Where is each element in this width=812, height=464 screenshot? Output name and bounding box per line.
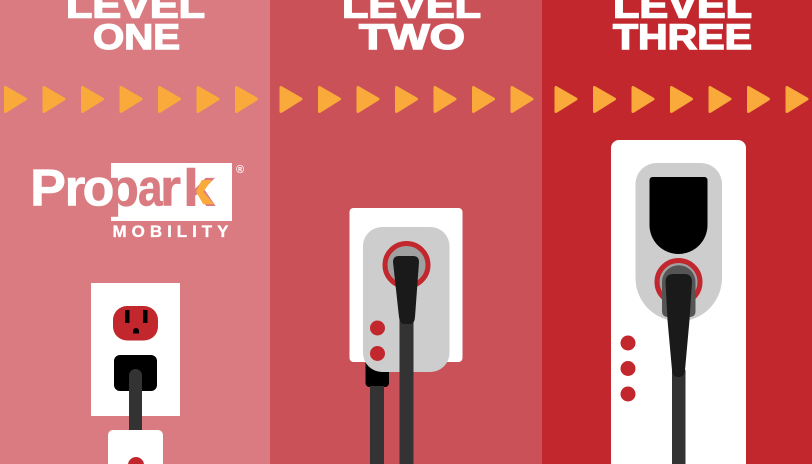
black screen (650, 177, 708, 254)
logo word: Pro: P (30, 160, 66, 218)
rear plug (366, 350, 389, 387)
socket right slot (143, 310, 148, 323)
logo word: Pro (30, 160, 114, 218)
logo word: park (107, 160, 215, 218)
front cord (400, 318, 414, 464)
status dot one (370, 320, 385, 336)
icon: level one outlet and plug (91, 283, 180, 464)
gray charger body (636, 163, 722, 321)
arrows: level three row (556, 88, 807, 112)
outlet plate (91, 283, 180, 416)
panel: level one (0, 0, 270, 464)
white cabinet (611, 140, 746, 464)
white wall plate (350, 208, 462, 362)
red socket (113, 306, 158, 340)
heading: level one (66, 0, 205, 57)
logo word: Pro: o (82, 160, 114, 218)
status dot two (620, 361, 636, 376)
logo: Propark Mobility (30, 160, 244, 241)
gray charger body (363, 227, 450, 372)
status dot one (620, 336, 636, 350)
heading: level one: ONE (93, 18, 180, 57)
registered mark: ® (236, 164, 244, 176)
logo word: Mobility: MOBILITY (112, 222, 229, 241)
rear cord (370, 386, 384, 464)
arrows: level one row (6, 88, 256, 112)
cord (672, 370, 686, 464)
connector handle (393, 256, 419, 324)
panel: level two (270, 0, 542, 464)
black plug (114, 355, 157, 391)
logo word: park: r (160, 160, 181, 218)
red port ring (657, 260, 700, 304)
connector handle (666, 274, 692, 377)
icon: level three charger (611, 140, 746, 464)
red port ring (385, 244, 428, 286)
status dot two (370, 346, 385, 361)
status dot three (620, 386, 636, 402)
heading: level two (342, 0, 481, 57)
panel: level three (542, 0, 812, 464)
logo word: park: p (107, 160, 139, 218)
socket left slot (125, 310, 130, 323)
lower white charger box (108, 430, 163, 464)
icon: level two charger (350, 208, 462, 464)
logo word: Pro: r (64, 160, 86, 218)
heading: level two: TWO (359, 18, 465, 57)
logo white box (111, 163, 232, 221)
lower box red dot (128, 457, 144, 464)
heading: level three (613, 0, 752, 57)
socket ground hole (133, 328, 139, 334)
logo word: park: a (138, 160, 163, 218)
logo word: park: k (183, 160, 215, 218)
plug cord (129, 369, 142, 431)
arrows: level two row (281, 88, 532, 112)
logo orange chevron (196, 180, 214, 204)
heading: level three: THREE (613, 18, 752, 57)
dark connector collar (662, 265, 696, 317)
